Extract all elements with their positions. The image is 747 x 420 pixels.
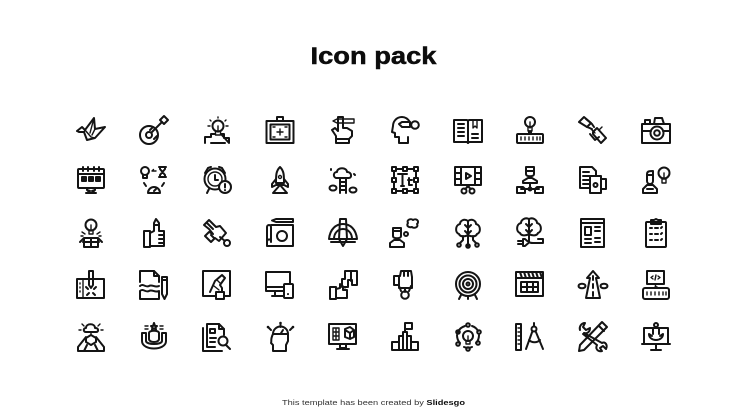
icon: presentation board with anchor — [642, 323, 670, 350]
icon: podium with flag — [392, 323, 418, 350]
icon: brain with plug — [517, 218, 543, 246]
icon: clapperboard schedule — [516, 272, 543, 296]
icon: code screen and keyboard — [643, 271, 669, 299]
icon: wrench and pencil crossed — [579, 322, 607, 351]
icon: torn document and pencil — [140, 271, 167, 299]
icon: framed picture — [266, 117, 294, 143]
icon: cloud tree with ladder — [330, 168, 356, 193]
icon: brain circuit — [456, 220, 480, 248]
icon: thumbs up with pencil — [144, 219, 164, 247]
icon: person with idea cloud — [78, 324, 104, 351]
icon: alarm clock with alert — [204, 167, 231, 193]
icon: camera on tripod mount — [394, 271, 412, 299]
icon: floor plan sheet — [581, 219, 604, 247]
icon: protractor compass — [329, 219, 357, 246]
icon: clipboard checklist — [646, 219, 666, 247]
icon: text selection box — [392, 167, 418, 193]
icon: monitor and tablet — [266, 272, 293, 298]
icon: ruler and compass — [516, 323, 543, 350]
icon: calendar with hourglass — [78, 167, 104, 193]
title: Icon pack — [310, 43, 437, 70]
icon: open book — [454, 120, 482, 143]
icon: target — [456, 272, 480, 299]
icon: fingers with pencil — [332, 117, 354, 143]
icon: film strip with scissors — [455, 167, 481, 194]
icon: chisel hand tool — [579, 117, 606, 143]
icon: hand with paintbrush — [204, 220, 230, 246]
icon: guitar — [140, 116, 168, 144]
icon: blueprint and pencil — [267, 219, 293, 246]
icon: documents magnifier — [203, 324, 230, 351]
icon: road arrow — [578, 271, 608, 298]
icon: monitor with 3d cube — [329, 324, 356, 349]
icon: worker with idea — [643, 168, 670, 193]
icon: worker org chart — [517, 167, 543, 193]
icon: documents and mug — [580, 167, 606, 193]
icon: bulb with orbit nodes — [456, 323, 481, 351]
icon: raised arms with star — [142, 323, 166, 348]
icon grid — [77, 116, 670, 351]
icon: rocket — [272, 167, 288, 193]
icon: bulb on podium — [205, 117, 229, 143]
icon: hands connecting — [330, 271, 357, 299]
footer credit: This template has been created by Slidesgo — [282, 398, 466, 407]
icon: keyboard with bulb — [517, 117, 543, 143]
icon: tablet with pen tool — [77, 271, 104, 298]
icon: head with key — [392, 117, 419, 143]
icon: head with gauge — [267, 322, 294, 351]
icon: bulb in open box — [80, 220, 102, 247]
icon: idea, hourglass and gauge — [141, 167, 166, 193]
icon: drawing hand on canvas — [203, 271, 230, 299]
icon: camera — [642, 118, 670, 143]
icon: origami crane — [77, 118, 105, 140]
icon: worker with thought — [390, 219, 418, 247]
